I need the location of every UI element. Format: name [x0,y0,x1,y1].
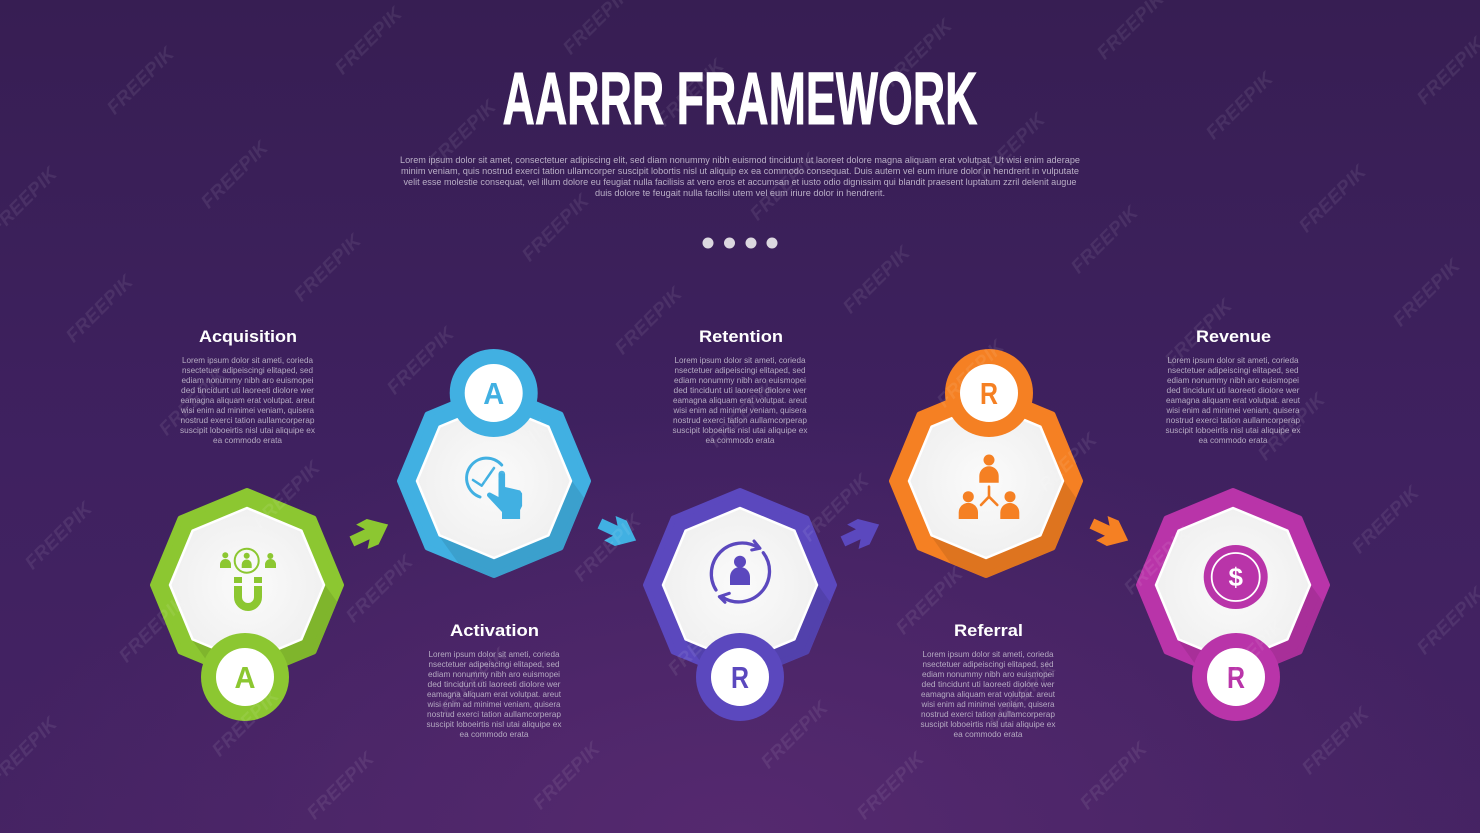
body text: acquisition: ea commodo erata [213,435,282,445]
icon: referral network of people [959,454,1019,519]
panel: acquisition octagon [150,488,344,721]
panel: retention text [672,327,808,445]
body text: retention: ded tincidunt uti laoreeti diolore wer [674,385,807,395]
body text: revenue [1166,355,1301,445]
arrow: referral to revenue [1086,511,1134,553]
watermark layer: FREEPIK [249,457,325,533]
badge: letter R [696,633,784,721]
badge: letter R [945,349,1033,437]
icon: dollar coin [1204,545,1268,609]
watermark layer: FREEPIK [436,644,512,720]
body text: referral: eamagna aliquam erat volutpat. areut [921,689,1056,699]
body text: retention: nsectetuer adipeiscingi elitaped, sed [674,365,806,375]
watermark layer: FREEPIK [21,498,97,574]
watermark layer: FREEPIK [115,591,191,667]
body text: retention: suscipit loboeirtis nisl utai aliquipe ex [672,425,808,435]
body text: revenue: ded tincidunt uti laoreeti diolore wer [1166,385,1300,395]
body text: revenue: Lorem ipsum dolor sit ameti, corieda [1168,355,1299,365]
watermark layer: FREEPIK [839,242,915,318]
intro text block: duis dolore te feugait nulla facilisi utem vel eum iriure dolor in hendrerit. [595,188,885,199]
body text: retention: wisi enim ad minimei veniam, quisera [673,405,807,415]
body text: acquisition: Lorem ipsum dolor sit ameti, corieda [182,355,313,365]
panel: activation text [426,621,562,739]
body text: referral [920,649,1056,739]
body text: revenue: suscipit loboeirtis nisl utai aliquipe ex [1166,425,1301,435]
body text: revenue: ea commodo erata [1198,435,1268,445]
watermark layer: FREEPIK [881,15,957,91]
body text: retention [672,355,808,445]
watermark layer: FREEPIK [985,657,1061,733]
heading: acquisition: Acquisition [199,327,297,346]
body text: activation: eamagna aliquam erat volutpat. areut [427,689,562,699]
watermark layer: FREEPIK [290,230,366,306]
body text: acquisition: nsectetuer adipeiscingi elitaped, sed [182,365,313,375]
watermark layer: FREEPIK [1120,523,1196,599]
intro text block [400,155,1080,199]
icon: magnet attracting people [220,549,276,607]
watermark layer: FREEPIK [664,604,740,680]
body text: activation: Lorem ipsum dolor sit ameti, corieda [428,649,560,659]
watermark layer: FREEPIK [103,43,179,119]
body text: referral: ded tincidunt uti laoreeti diolore wer [922,679,1055,689]
badge: letter A [201,633,289,721]
body text: acquisition: wisi enim ad minimei veniam, quisera [180,405,314,415]
watermark layer: FREEPIK [1076,738,1152,814]
body text: referral: wisi enim ad minimei veniam, quisera [921,699,1055,709]
body text: activation: ediam nonummy nibh aro euismopei [428,669,560,679]
watermark layer: FREEPIK [62,271,138,347]
watermark layer: FREEPIK [933,336,1009,412]
watermark layer: FREEPIK [1254,389,1330,465]
watermark layer: FREEPIK [746,149,822,225]
body text: referral: nostrud exerci tation aullamcorperap [921,709,1055,719]
watermark layer: FREEPIK [383,323,459,399]
intro text block: velit esse molestie consequat, vel illum dolore eu feugiat nulla facilisis at vero eros et accumsan et iusto odio dignissim qui blandit praesent luptatum zzril delenit augue [404,177,1076,188]
body text: retention: ediam nonummy nibh aro euismopei [674,375,806,385]
body text: retention: Lorem ipsum dolor sit ameti, corieda [674,355,806,365]
watermark layer: FREEPIK [757,697,833,773]
title: AARRR FRAMEWORK [502,57,978,140]
watermark layer: FREEPIK [529,738,605,814]
pagination dots [702,238,778,248]
body text: activation: nsectetuer adipeiscingi elitaped, sed [428,659,560,669]
watermark layer: FREEPIK [853,748,929,824]
body text: revenue: ediam nonummy nibh aro euismopei [1167,375,1299,385]
body text: activation: ea commodo erata [460,729,529,739]
panel: revenue octagon [1136,488,1330,721]
watermark layer: FREEPIK [208,685,284,761]
watermark layer: FREEPIK [342,551,418,627]
body text: referral: suscipit loboeirtis nisl utai aliquipe ex [920,719,1056,729]
watermark layer: FREEPIK [798,470,874,546]
badge: letter A: A [483,376,504,411]
watermark layer: FREEPIK [1298,703,1374,779]
body text: acquisition: suscipit loboeirtis nisl utai aliquipe ex [180,425,316,435]
body text: revenue: wisi enim ad minimei veniam, quisera [1166,405,1300,415]
panel: acquisition text [180,327,316,445]
body text: activation: nostrud exerci tation aullamcorperap [427,709,561,719]
body text: retention: nostrud exerci tation aullamcorperap [673,415,807,425]
panel: referral octagon [889,349,1083,578]
arrow: retention to referral [837,512,885,554]
watermark layer: FREEPIK [303,748,379,824]
watermark layer: FREEPIK [570,510,646,586]
heading: referral: Referral [954,621,1023,640]
body text: activation: suscipit loboeirtis nisl utai aliquipe ex [426,719,562,729]
watermark layer: FREEPIK [1348,482,1424,558]
body text: retention: eamagna aliquam erat volutpat. areut [673,395,808,405]
badge: letter R [1192,633,1280,721]
watermark layer: FREEPIK [892,563,968,639]
arrow: activation to retention [594,511,642,553]
panel: activation octagon [397,349,591,578]
badge: letter R: R [980,376,998,411]
body text: activation: ded tincidunt uti laoreeti diolore wer [428,679,561,689]
watermark layer: FREEPIK [705,376,781,452]
body text: referral: ea commodo erata [954,729,1023,739]
body text: acquisition: nostrud exerci tation aullamcorperap [180,415,315,425]
arrow: acquisition to activation [346,512,394,554]
watermark layer: FREEPIK [1067,202,1143,278]
watermark layer: FREEPIK [331,3,407,79]
body text: retention: ea commodo erata [706,435,775,445]
watermark layer: FREEPIK [1202,68,1278,144]
watermark layer: FREEPIK [1295,161,1371,237]
badge: letter A: A [234,660,256,695]
watermark layer: FREEPIK [518,190,594,266]
body text: revenue: nsectetuer adipeiscingi elitaped, sed [1168,365,1299,375]
watermark layer: FREEPIK [611,283,687,359]
panel: retention octagon [643,488,837,721]
panel: referral text [920,621,1056,739]
body text: revenue: eamagna aliquam erat volutpat. areut [1166,395,1301,405]
body text: acquisition: ediam nonummy nibh aro euismopei [182,375,314,385]
heading: activation: Activation [450,621,539,640]
body text: acquisition: eamagna aliquam erat volutpat. areut [180,395,315,405]
intro text block: Lorem ipsum dolor sit amet, consectetuer adipiscing elit, sed diam nonummy nibh euismod tincidunt ut laoreet dolore magna aliquam erat volutpat. Ut wisi enim aderape [400,155,1080,166]
watermark layer: FREEPIK [155,364,231,440]
body text: referral: ediam nonummy nibh aro euismopei [922,669,1054,679]
icon: person in retention cycle [711,541,770,602]
heading: retention: Retention [699,327,783,346]
badge: letter R: R [1227,660,1245,695]
body text: activation [426,649,562,739]
watermark layer: FREEPIK [197,137,273,213]
badge: letter A [450,349,538,437]
body text: revenue: nostrud exerci tation aullamcorperap [1166,415,1300,425]
body text: acquisition: ded tincidunt uti laoreeti diolore wer [181,385,314,395]
body text: referral: Lorem ipsum dolor sit ameti, corieda [922,649,1054,659]
watermark layer: FREEPIK [1389,255,1465,331]
body text: referral: nsectetuer adipeiscingi elitaped, sed [922,659,1054,669]
icon: hand tapping check mark [467,458,522,519]
watermark layer: FREEPIK [1026,429,1102,505]
intro text block: minim veniam, quis nostrud exerci tation ullamcorper suscipit lobortis nisl ut aliquip ex ea commodo consequat. Duis autem vel eum iriure dolor in hendrerit in vulputate [401,166,1079,177]
watermark layer: FREEPIK [425,96,501,172]
watermark layer: FREEPIK [1161,295,1237,371]
watermark layer: FREEPIK [1213,616,1289,692]
panel: revenue text [1166,327,1301,445]
body text: activation: wisi enim ad minimei veniam, quisera [427,699,561,709]
badge: letter R: R [731,660,749,695]
heading: revenue: Revenue [1196,327,1271,346]
icon: dollar coin: $ [1228,562,1243,592]
body text: acquisition [180,355,316,445]
watermark layer: FREEPIK [653,55,729,131]
watermark layer: FREEPIK [974,109,1050,185]
watermark layer: FREEPIK [477,417,553,493]
